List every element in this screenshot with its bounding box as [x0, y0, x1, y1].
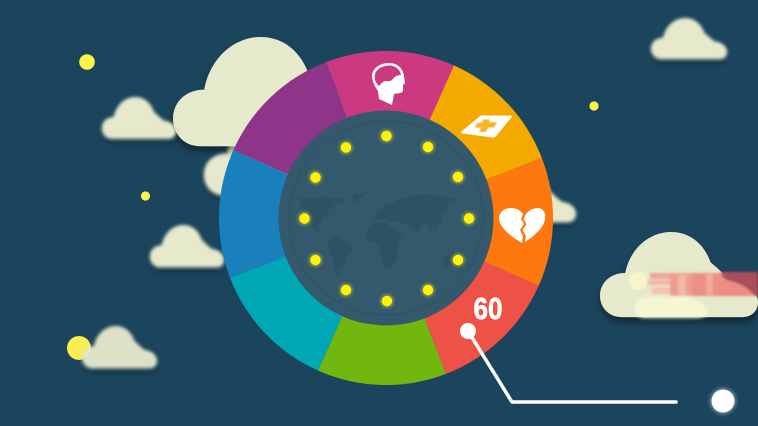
callout connector line: [468, 331, 676, 402]
pale lower ellipse: [635, 297, 708, 318]
segment: green: [318, 218, 446, 385]
segment: blue: [219, 150, 386, 278]
segment: orange: [386, 158, 553, 286]
cloud: large behind wheel: [173, 37, 368, 146]
icon: medical card: [461, 116, 512, 138]
cloud: behind wheel right: [490, 175, 576, 222]
segment: teal: [230, 218, 386, 371]
number label: 60: [474, 292, 502, 327]
pale glow spot: [629, 272, 647, 290]
cloud: lower left: [82, 326, 157, 368]
segment: pink: [326, 51, 454, 218]
cloud: behind wheel left: [204, 114, 349, 195]
world map: [299, 192, 458, 279]
cloud: small upper left: [102, 97, 176, 138]
segment: red: [386, 218, 539, 374]
light dots ring: [298, 130, 476, 308]
callout end dot: [710, 388, 736, 414]
segment: amber: [386, 65, 542, 218]
icon: broken heart: [499, 208, 545, 243]
cloud: top right: [651, 18, 727, 59]
star dots: [79, 54, 599, 201]
moon: lower left: [67, 336, 91, 360]
icon: head with brain: [372, 63, 405, 105]
segment: purple: [233, 62, 386, 218]
callout start dot: [460, 323, 476, 339]
cloud: large right with streak: [600, 232, 758, 318]
cloud: middle left: [150, 225, 224, 267]
inner disc: [278, 110, 494, 326]
donut wheel: [219, 51, 553, 385]
red motion streak: [648, 272, 758, 296]
